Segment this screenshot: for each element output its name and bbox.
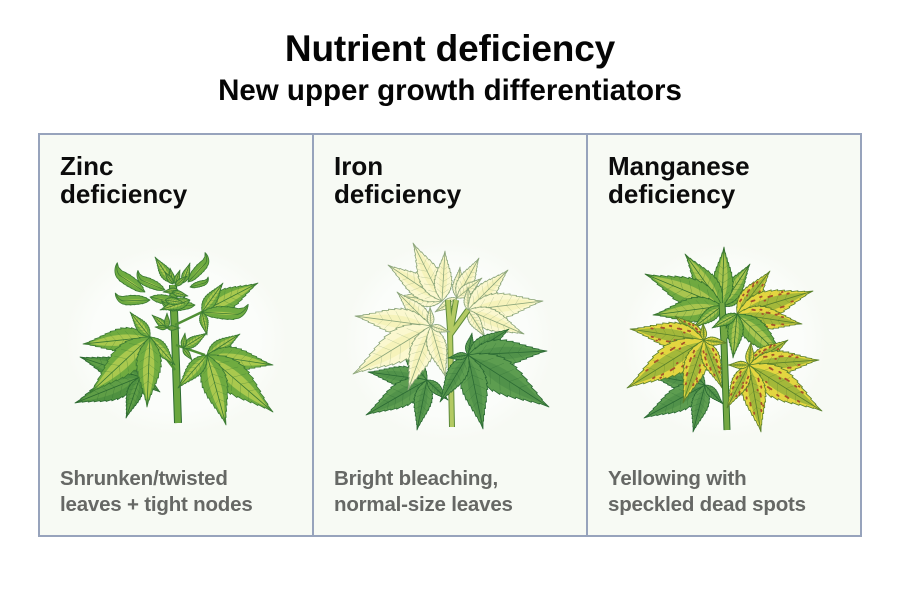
heading: iron <box>334 151 461 209</box>
caption: iron: Bright bleaching, <box>334 467 498 490</box>
caption: manganese: speckled dead spots <box>608 493 806 516</box>
icon: manganese deficient plant <box>622 244 827 439</box>
heading: zinc: deficiency <box>60 179 187 209</box>
heading: manganese: deficiency <box>608 179 735 209</box>
heading: manganese: Manganese <box>608 151 750 181</box>
subtitle: New upper growth differentiators <box>218 74 682 107</box>
heading: iron: Iron <box>334 151 383 181</box>
title: Nutrient deficiency <box>285 28 615 69</box>
icon: zinc deficient plant <box>65 245 287 435</box>
panel: zinc deficiency <box>38 133 314 537</box>
caption: iron <box>334 467 513 516</box>
caption: zinc: Shrunken/twisted <box>60 467 228 490</box>
panel: iron deficiency <box>312 133 588 537</box>
caption: zinc <box>60 467 253 516</box>
heading: iron: deficiency <box>334 179 461 209</box>
caption: manganese: Yellowing with <box>608 467 746 490</box>
caption: iron: normal-size leaves <box>334 493 513 516</box>
panel: manganese deficiency <box>586 133 862 537</box>
icon: iron deficient plant <box>344 241 554 441</box>
caption: zinc: leaves + tight nodes <box>60 493 253 516</box>
heading: manganese <box>608 151 750 209</box>
caption: manganese <box>608 467 806 516</box>
heading: zinc: Zinc <box>60 151 113 181</box>
heading: zinc <box>60 151 187 209</box>
